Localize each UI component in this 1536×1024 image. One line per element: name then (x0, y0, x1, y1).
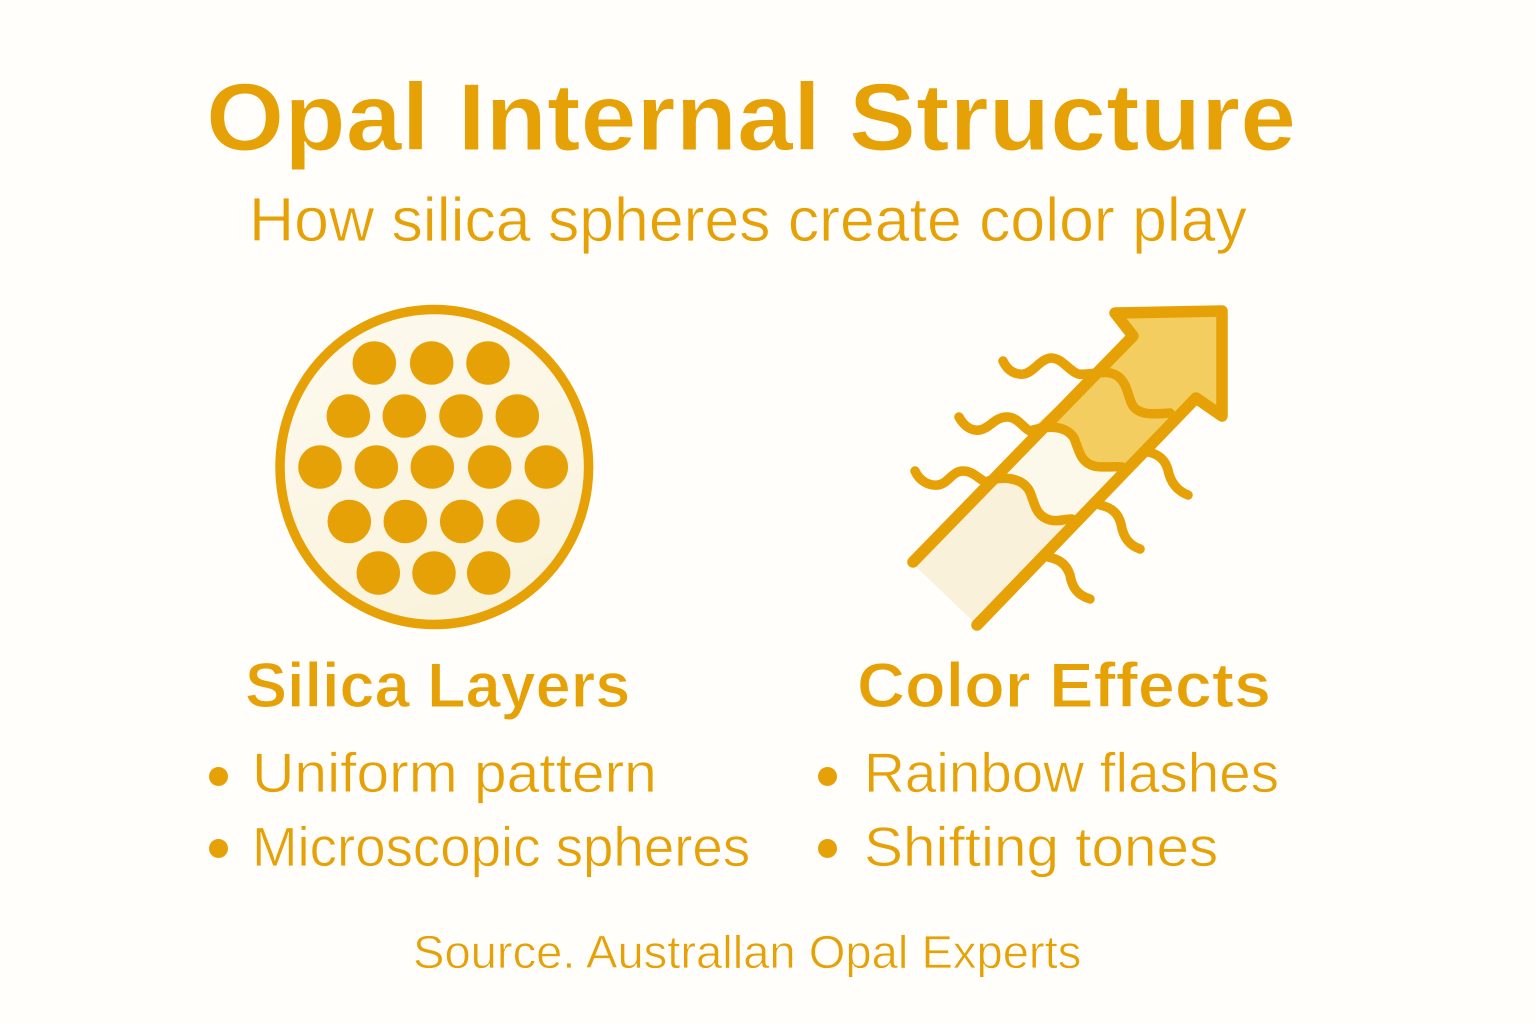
exit ray three (1048, 557, 1090, 599)
exit ray two (1100, 505, 1140, 549)
icon: silica sphere lattice (275, 304, 594, 630)
heading: Color Effects: Color Effects (857, 651, 1271, 721)
arrow middle fill (986, 427, 1122, 521)
list: silica layers: Microscopic spheres (252, 815, 750, 878)
disc outline (280, 310, 589, 624)
subtitle: How silica spheres create color play (249, 186, 1247, 255)
list: color effects (818, 741, 1279, 878)
arrow tail fill (913, 478, 1072, 625)
lower wavy ray (915, 471, 1072, 521)
list: silica layers: Uniform pattern (252, 741, 657, 804)
list: color effects: Rainbow flashes (864, 741, 1279, 804)
arrow head fill (1030, 311, 1222, 467)
title: Opal Internal Structure (206, 64, 1296, 171)
list: silica layers (209, 741, 750, 878)
arrow outline (913, 311, 1222, 625)
upper wavy ray (1003, 358, 1170, 414)
source note: Source. Australlan Opal Experts (413, 926, 1081, 978)
list: color effects: Shifting tones (864, 815, 1218, 878)
middle wavy ray (959, 417, 1122, 467)
heading: Silica Layers: Silica Layers (245, 651, 630, 721)
icon: light arrow with wavy rays (907, 305, 1228, 631)
silica spheres (298, 341, 568, 595)
exit ray one (1148, 452, 1188, 495)
